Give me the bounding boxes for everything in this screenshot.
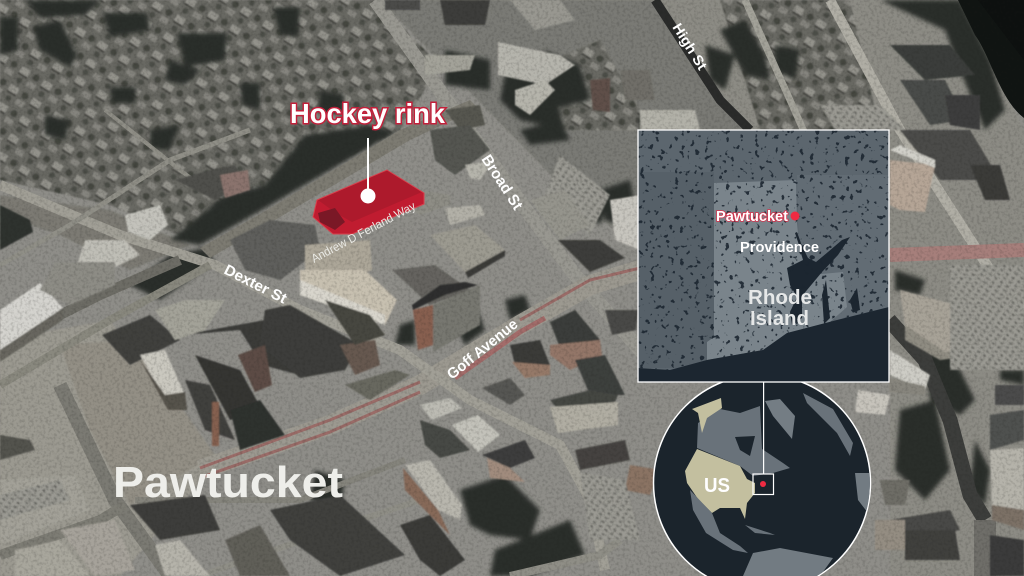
label: Pawtucket: Pawtucket xyxy=(716,209,788,225)
rail corridor xyxy=(200,100,478,258)
Europe xyxy=(803,393,853,456)
locator box xyxy=(753,474,774,494)
land shading xyxy=(797,175,889,320)
Greenland xyxy=(765,399,795,439)
connector line from inset to globe xyxy=(763,382,764,474)
sea xyxy=(638,307,889,382)
label: hockey rink: Hockey rink xyxy=(290,98,445,129)
label: US: US xyxy=(704,475,730,497)
street label: High St: High St xyxy=(669,20,711,73)
ponds texture xyxy=(638,130,889,370)
street label: Andrew D Ferland Way: Andrew D Ferland Way xyxy=(309,199,418,266)
label: Providence: Providence xyxy=(740,240,819,256)
river xyxy=(958,0,1024,118)
building highlight: hockey rink xyxy=(313,170,424,234)
Africa xyxy=(855,473,870,511)
South America xyxy=(743,548,833,576)
pointer line to rink xyxy=(360,138,376,204)
label: Rhode Island xyxy=(748,286,812,330)
street label: Dexter St: Dexter St xyxy=(221,261,289,307)
marker dot: Pawtucket xyxy=(790,212,800,220)
Alaska xyxy=(692,398,722,433)
Canada xyxy=(697,406,790,476)
Rhode Island shape xyxy=(707,180,847,360)
street label: Goff Avenue: Goff Avenue xyxy=(444,316,521,383)
street label: Broad St: Broad St xyxy=(478,152,526,213)
United States xyxy=(685,449,755,519)
label: Rhode Island: Rhode xyxy=(748,286,812,309)
label: Rhode Island: Island xyxy=(750,307,809,330)
frame xyxy=(638,130,889,382)
Caribbean xyxy=(745,525,775,535)
locator dot xyxy=(760,481,766,487)
place label: Pawtucket: Pawtucket xyxy=(113,458,343,507)
Narragansett Bay xyxy=(787,232,850,325)
Mexico and Central America xyxy=(690,490,748,553)
inset map: Rhode Island xyxy=(638,130,889,382)
globe locator xyxy=(654,374,871,576)
